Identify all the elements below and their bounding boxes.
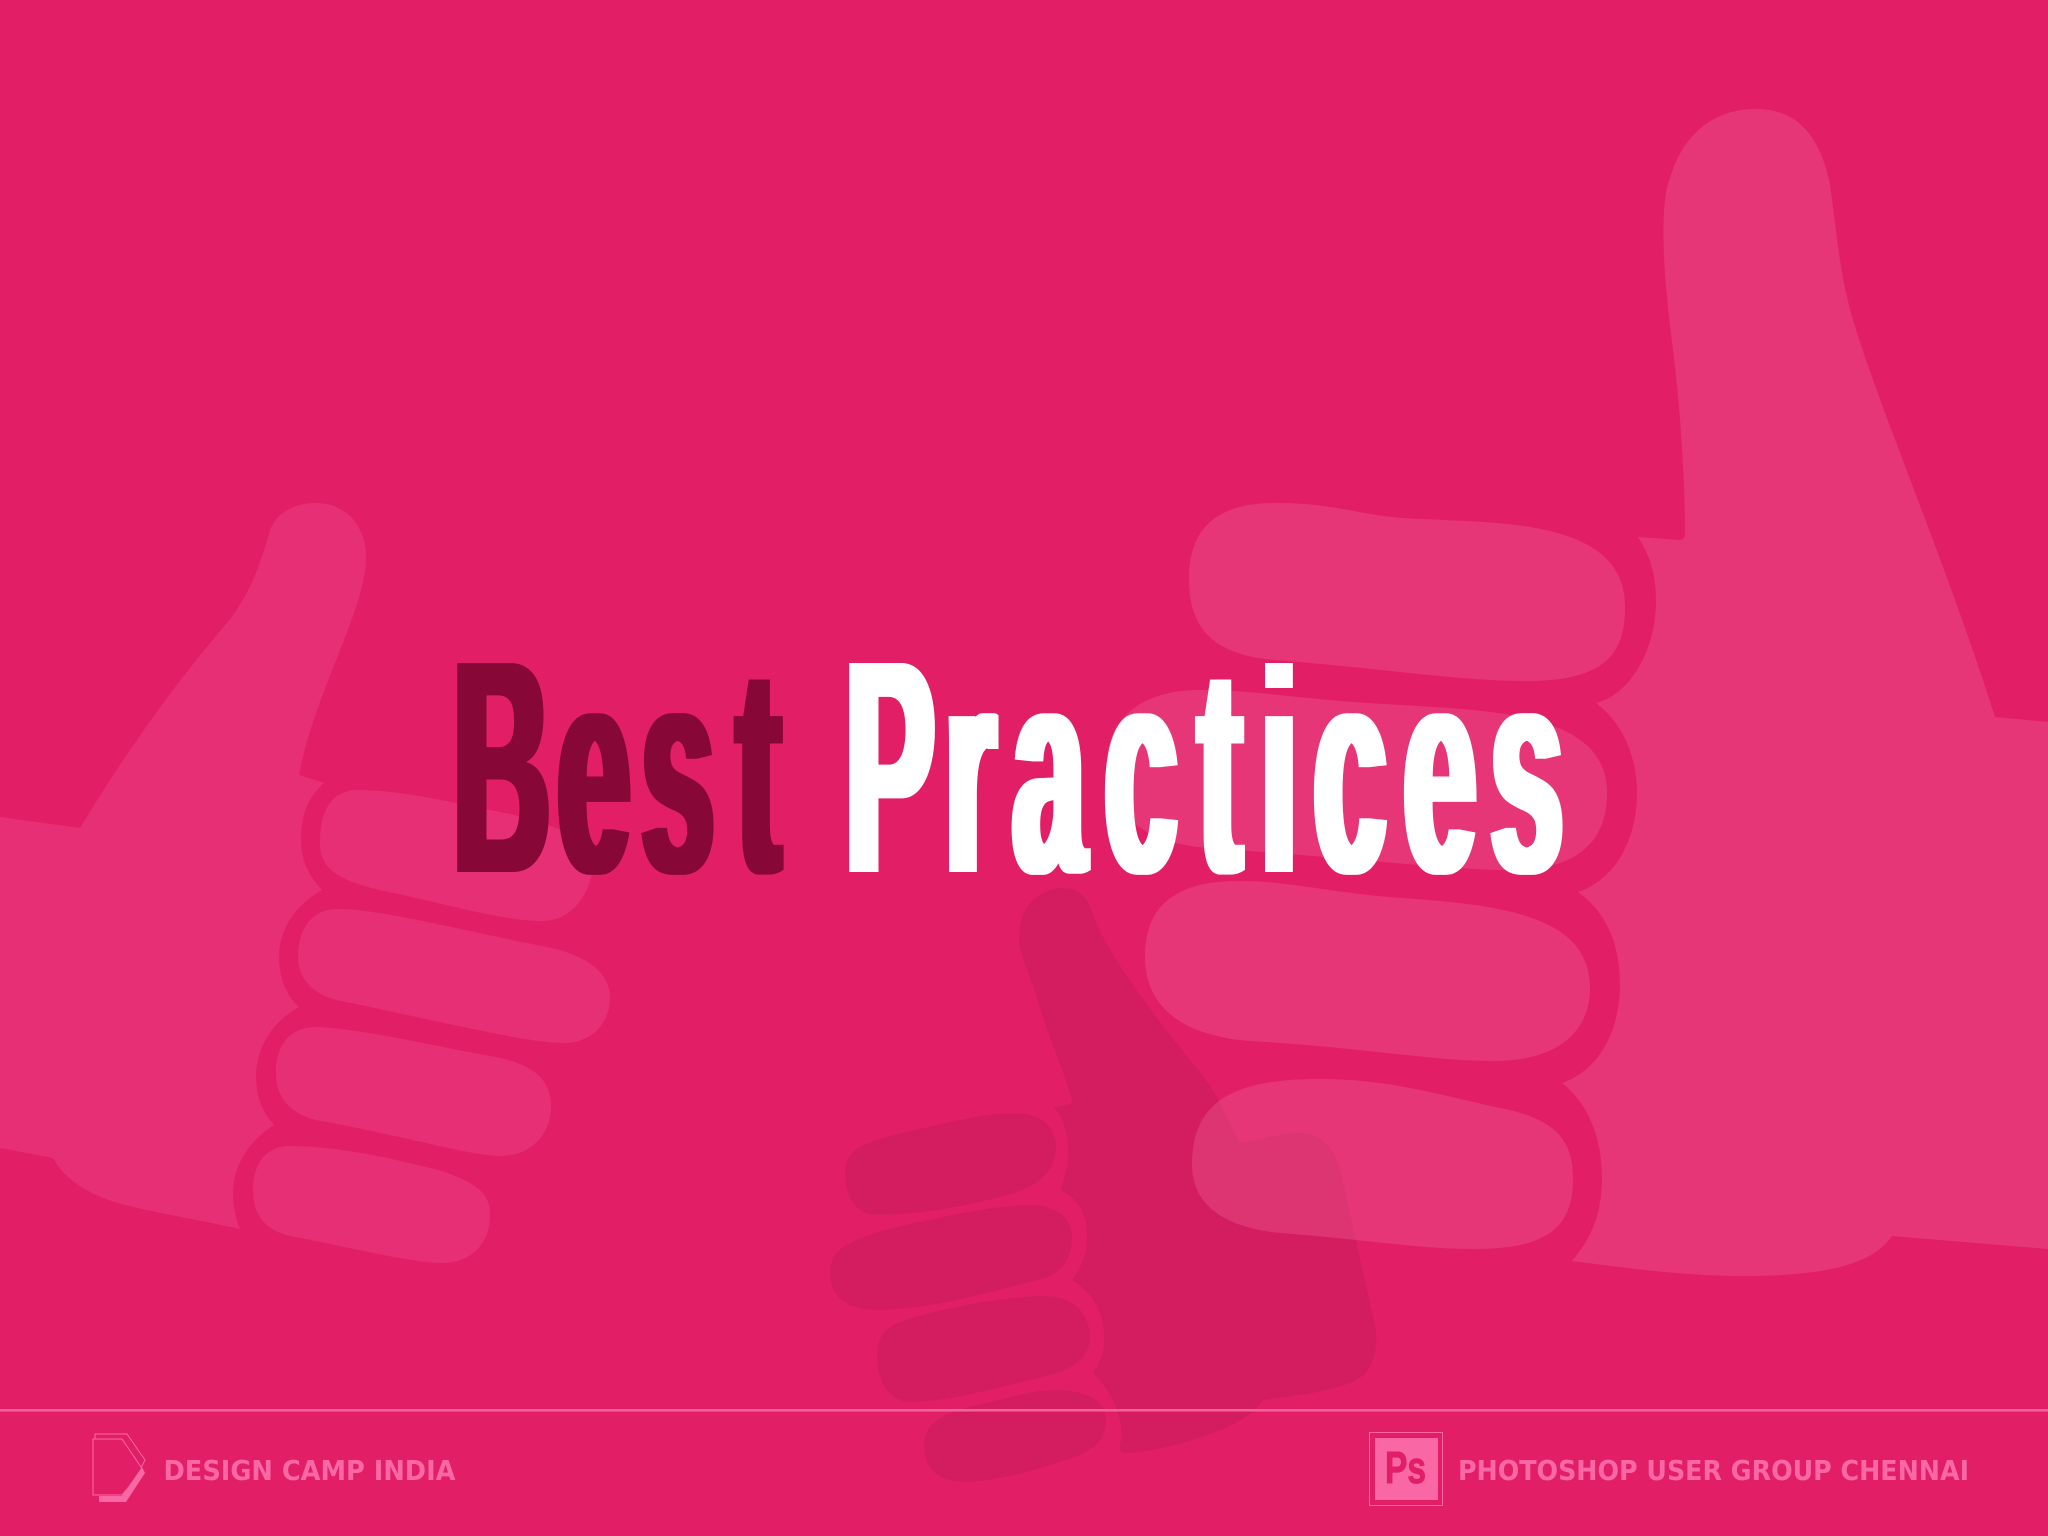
right hand finger 3 — [1145, 881, 1590, 1061]
left hand finger 3 — [276, 1027, 551, 1156]
dark hand palm and thumb — [1019, 888, 1376, 1453]
label: Design Camp India: DESIGN CAMP INDIA — [164, 1455, 456, 1487]
right hand finger 4 — [1192, 1079, 1573, 1249]
icon: large thumbs-up hand, right — [1107, 109, 2048, 1276]
left hand finger 1 — [320, 790, 592, 921]
right hand finger 2 — [1107, 690, 1607, 870]
icon: thumbs-up hand, left — [0, 503, 610, 1263]
right hand palm and thumb — [1562, 109, 2048, 1276]
icon: Photoshop logo: Ps — [1385, 1442, 1426, 1493]
left hand finger 2 — [298, 909, 610, 1043]
dark hand finger 2 — [830, 1205, 1072, 1310]
title word: Practices: Practices — [845, 598, 1563, 937]
footer right: Photoshop User Group Chennai — [1370, 1432, 1969, 1506]
icon: Design Camp India logo — [93, 1434, 145, 1502]
dark hand finger 3 — [877, 1296, 1090, 1402]
title — [457, 663, 1563, 875]
dark hand finger 4 — [924, 1390, 1106, 1482]
dark hand finger 1 — [845, 1113, 1056, 1215]
icon: dark thumbs-up hand, centre bottom — [830, 888, 1376, 1482]
right hand finger 1 — [1189, 503, 1625, 681]
footer left: Design Camp India — [93, 1434, 456, 1502]
label: Photoshop User Group Chennai: PHOTOSHOP USER GROUP CHENNAI — [1458, 1455, 1969, 1487]
icon: Photoshop logo — [1370, 1432, 1442, 1506]
title word: Best: Best — [453, 598, 780, 937]
left hand finger 4 — [253, 1146, 490, 1263]
left hand palm and thumb — [0, 503, 366, 1229]
